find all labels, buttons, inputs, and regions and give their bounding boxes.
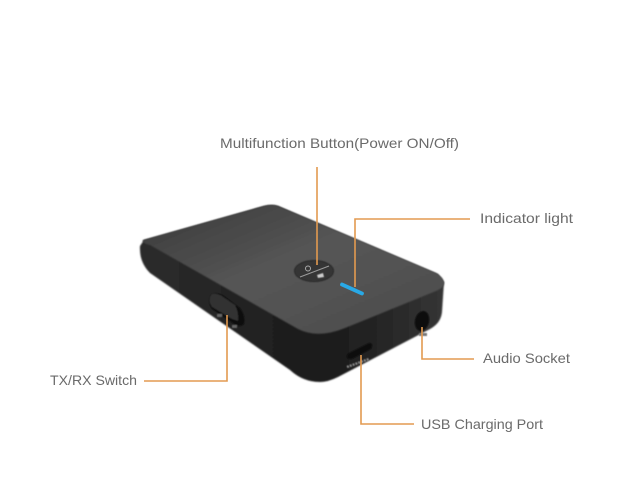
leader line: USB — [361, 355, 414, 424]
device: Bluetooth transmitter receiver — [140, 205, 444, 382]
button — [294, 260, 334, 282]
leader line: audio — [422, 327, 474, 359]
TX/RX switch — [209, 293, 244, 328]
leader line: switch — [144, 315, 227, 381]
device top face — [143, 205, 444, 334]
label: audio socket: Audio Socket — [483, 350, 570, 366]
label: TX/RX switch: TX/RX Switch — [50, 372, 137, 388]
leader line: indicator — [355, 219, 470, 287]
leader line: button — [316, 167, 318, 265]
device body — [140, 205, 444, 382]
indicator light — [342, 284, 362, 294]
label: multifunction button: Multifunction Button(Power ON/Off) — [220, 135, 459, 151]
audio socket — [413, 310, 431, 336]
USB port — [347, 343, 372, 367]
label: indicator light: Indicator light — [480, 210, 573, 226]
label: USB charging port: USB Charging Port — [421, 416, 543, 432]
